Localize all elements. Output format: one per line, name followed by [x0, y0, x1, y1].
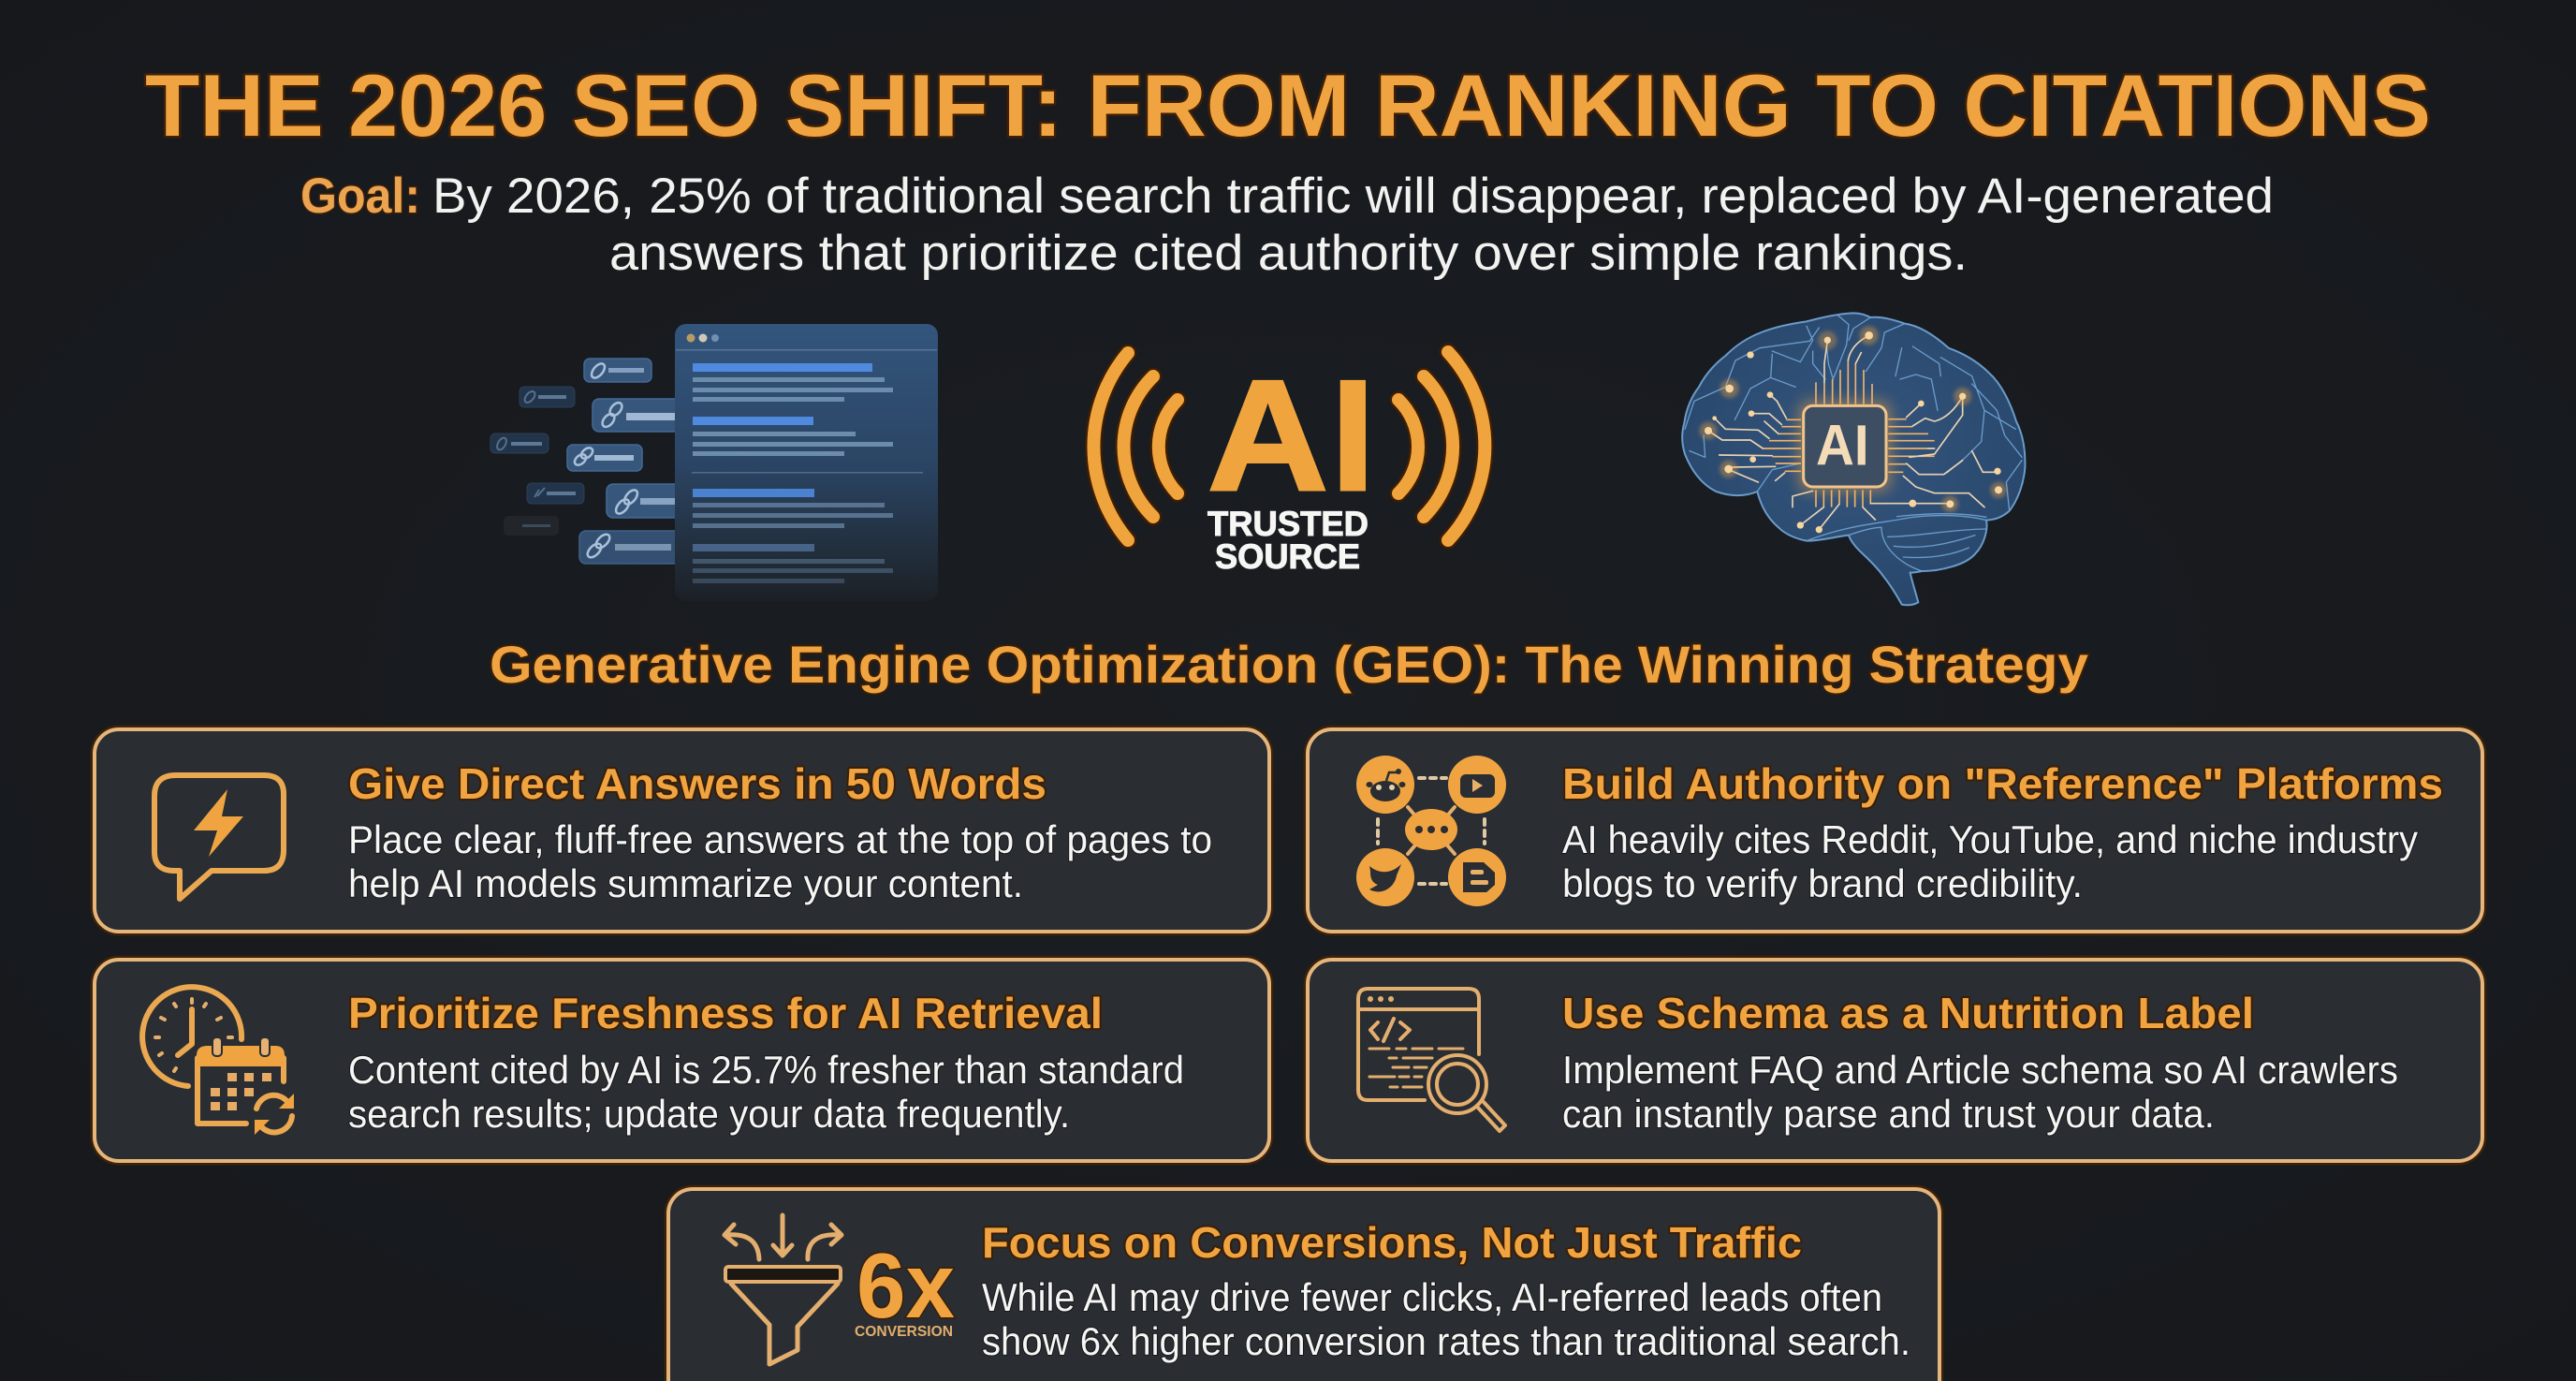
body text: While AI may drive fewer clicks, AI-referred leads often — [982, 1275, 1882, 1319]
icon: clock and calendar — [142, 987, 294, 1135]
body text: AI heavily cites Reddit, YouTube, and niche industry — [1562, 817, 2418, 861]
heading: Prioritize Freshness for AI Retrieval — [348, 989, 1103, 1037]
heading: Build Authority on "Reference" Platforms — [1562, 759, 2443, 808]
link chips — [490, 359, 681, 564]
body text: help AI models summarize your content. — [348, 861, 1023, 905]
section heading: Generative Engine Optimization (GEO): The Winning Strategy — [490, 635, 2088, 694]
illustration: AI trusted source signal: TRUSTED — [1208, 505, 1368, 543]
heading: Give Direct Answers in 50 Words — [348, 759, 1046, 808]
title: THE 2026 SEO SHIFT: FROM RANKING TO CITATIONS — [145, 56, 2431, 154]
icon: funnel with 6x conversion: 6x — [856, 1234, 955, 1337]
icon: code window with magnifier — [1358, 989, 1505, 1131]
AI chip — [1799, 401, 1891, 492]
body text: show 6x higher conversion rates than traditional search. — [982, 1319, 1910, 1363]
body text — [348, 817, 1212, 905]
illustration: brain with AI chip — [1682, 313, 2025, 605]
illustration: AI trusted source signal: SOURCE — [1215, 537, 1360, 576]
goal statement: Goal: — [300, 169, 420, 224]
heading: Use Schema as a Nutrition Label — [1562, 989, 2254, 1037]
illustration: AI trusted source signal — [1093, 347, 1485, 576]
panel: focus on conversions — [668, 1189, 1939, 1381]
circuit traces — [1700, 326, 2007, 533]
panel: prioritize freshness — [95, 960, 1269, 1161]
goal statement — [300, 169, 2274, 281]
AI chip: AI — [1816, 414, 1869, 478]
illustration: search results page with links — [490, 324, 938, 601]
goal statement: answers that prioritize cited authority over simple rankings. — [609, 226, 1968, 281]
signal arcs — [1093, 352, 1485, 540]
body text: Content cited by AI is 25.7% fresher than standard — [348, 1048, 1184, 1092]
illustration: AI trusted source signal: A — [1208, 347, 1328, 523]
body text — [348, 1048, 1184, 1136]
icon: speech bubble with lightning bolt — [154, 775, 284, 899]
body text: Implement FAQ and Article schema so AI crawlers — [1562, 1048, 2398, 1092]
browser window — [675, 324, 938, 601]
brain folds — [1685, 316, 2022, 571]
body text: can instantly parse and trust your data. — [1562, 1092, 2215, 1136]
panel: give direct answers — [95, 729, 1269, 932]
panel: use schema — [1308, 960, 2482, 1161]
heading: Focus on Conversions, Not Just Traffic — [982, 1218, 1802, 1267]
goal statement: By 2026, 25% of traditional search traffic will disappear, replaced by AI-generated — [432, 169, 2274, 224]
panel: build authority on reference platforms — [1308, 729, 2482, 932]
body text: Place clear, fluff-free answers at the top of pages to — [348, 817, 1212, 861]
icon: funnel with 6x conversion — [724, 1215, 955, 1364]
icon: social network cluster — [1356, 756, 1506, 906]
body text — [1562, 1048, 2398, 1136]
body text: blogs to verify brand credibility. — [1562, 861, 2083, 905]
illustration: AI trusted source signal: I — [1331, 347, 1375, 523]
body text: search results; update your data frequently. — [348, 1092, 1070, 1136]
icon: funnel with 6x conversion: CONVERSION — [855, 1324, 953, 1340]
brain outline — [1682, 313, 2025, 605]
body text — [982, 1275, 1910, 1363]
body text — [1562, 817, 2418, 905]
